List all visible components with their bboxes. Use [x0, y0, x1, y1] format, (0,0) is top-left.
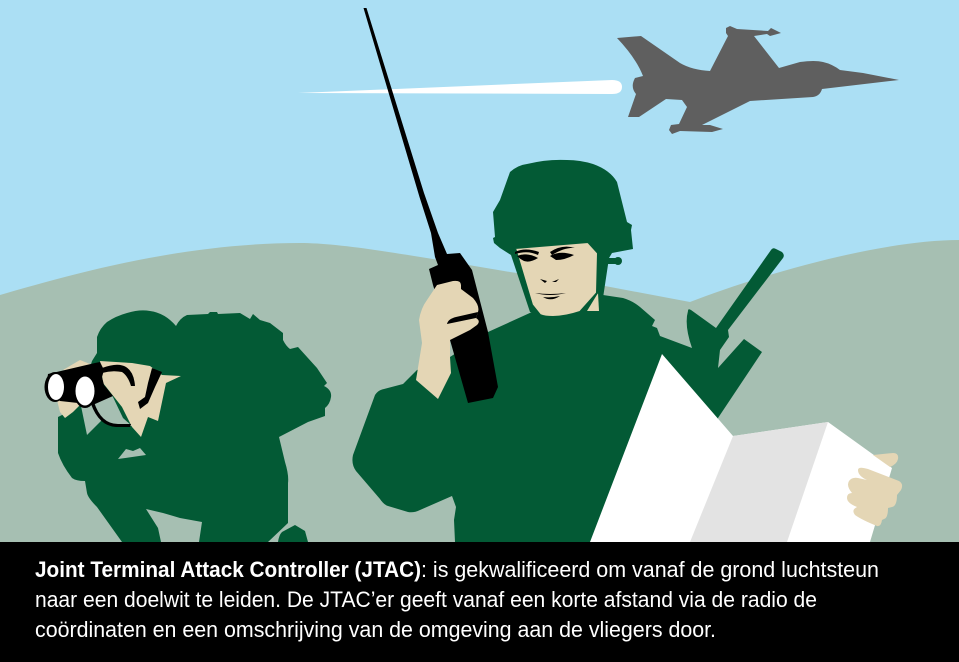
- neck: [587, 293, 599, 311]
- binocular body: [46, 362, 113, 406]
- face: [100, 361, 181, 437]
- folded map: [590, 354, 892, 542]
- left eyebrow: [515, 250, 539, 255]
- contrail: [298, 80, 622, 94]
- thumb behind map: [873, 453, 898, 467]
- helmet strap knob: [614, 257, 622, 265]
- fingers on top of binoculars: [63, 360, 95, 372]
- gap between arm and chin: [81, 395, 132, 435]
- map sheet: [590, 354, 892, 542]
- strap link: [606, 258, 618, 264]
- right eyebrow: [550, 247, 575, 255]
- gap in the jacket: [118, 448, 146, 459]
- helmet: [493, 160, 633, 320]
- right lens: [74, 374, 96, 408]
- small soldier with binoculars: [44, 310, 331, 542]
- left lens: [44, 372, 66, 402]
- foot: [278, 525, 308, 542]
- icon: fighter jet: [617, 26, 899, 134]
- hand holding radio: [416, 281, 479, 399]
- gap between fingers: [447, 312, 478, 324]
- chin strap: [138, 368, 162, 409]
- lower hand: [56, 396, 80, 418]
- hills: [0, 240, 959, 545]
- nose: [540, 279, 559, 283]
- caption line 1 bold: Joint Terminal Attack Controller (JTAC): [35, 557, 421, 582]
- body and backpack: [58, 310, 331, 542]
- radio with antenna: [364, 8, 498, 403]
- hand holding map: [847, 468, 902, 526]
- caption line 3: coördinaten en een omschrijving van de omgeving aan de vliegers door.: [35, 617, 716, 642]
- caption line 2: naar een doelwit te leiden. De JTAC’er geeft vanaf een korte afstand via de radio de: [35, 587, 817, 612]
- caption bar: [0, 542, 959, 662]
- left eye: [517, 254, 538, 262]
- caption text: [35, 557, 879, 642]
- main soldier: [352, 8, 902, 542]
- rifle and torso: [352, 248, 784, 542]
- mouth: [535, 293, 566, 299]
- caption line 1 regular: : is gekwalificeerd om vanaf de grond luchtsteun: [421, 557, 879, 582]
- face: [515, 242, 598, 317]
- map centre fold: [690, 422, 828, 542]
- right eye: [550, 253, 574, 260]
- binocular strap: [91, 365, 135, 427]
